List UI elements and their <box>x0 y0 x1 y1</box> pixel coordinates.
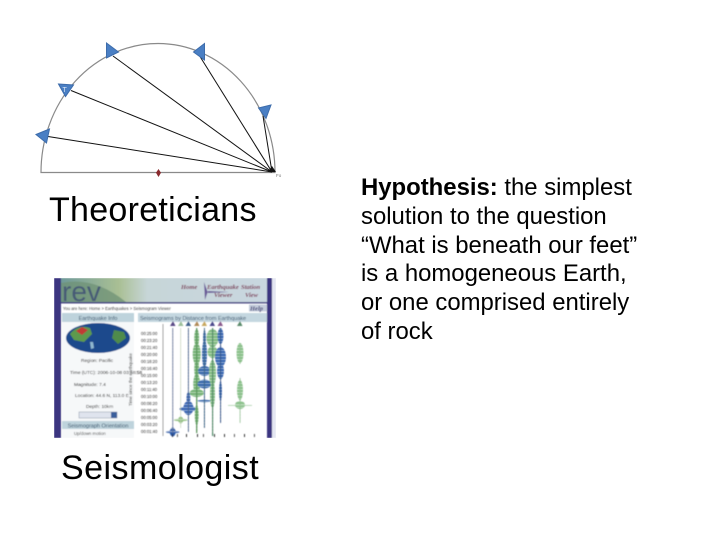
earthquake details: Region: Pacific <box>81 358 114 364</box>
text block: hypothesis: Hypothesis: the simplest <box>361 174 632 201</box>
chart title bar <box>138 313 267 322</box>
time ticks: 00:03:20 <box>141 422 158 427</box>
navigation tabs: Viewer <box>214 292 233 299</box>
panel: seismogram web page screenshot: Seismograph Orientation <box>68 424 128 430</box>
time ticks: 00:01:40 <box>141 429 158 434</box>
time ticks: 00:13:20 <box>141 380 158 385</box>
earthquake source <box>268 166 276 172</box>
time ticks: 00:08:20 <box>141 401 158 406</box>
help button <box>249 304 267 312</box>
trace 3 blobs <box>179 392 197 415</box>
station triangles <box>170 321 242 326</box>
ray paths <box>48 56 272 172</box>
world map <box>66 323 130 353</box>
trace 6 blobs <box>206 329 218 408</box>
earthquake details: Depth: 10km <box>86 404 113 410</box>
text block: hypothesis: or one comprised entirely <box>361 289 629 316</box>
panel: seismogram web page screenshot: Time since the earthquake <box>128 353 133 406</box>
time ticks: 00:05:00 <box>141 415 158 420</box>
left border bar <box>54 278 61 438</box>
time ticks: 00:21:40 <box>141 345 158 350</box>
panel: seismogram web page screenshot: Earthquake Info <box>79 316 117 322</box>
earthquake details: Location: 44.6 N, 113.0 E <box>75 393 129 399</box>
navigation tabs: Earthquake <box>206 284 239 291</box>
left panel <box>62 313 134 438</box>
trace 5 blobs <box>198 330 212 402</box>
section heading: orientation <box>62 421 134 429</box>
heading: Seismologist: Seismologist <box>61 449 259 487</box>
trace centre lines <box>172 328 252 436</box>
time ticks: 00:06:40 <box>141 408 158 413</box>
navigation tabs <box>180 284 261 299</box>
trace 4 blobs <box>190 329 204 425</box>
panel: seismogram web page screenshot: Up/down motion <box>74 431 106 436</box>
source label: Fo <box>276 173 282 178</box>
text block: hypothesis: “What is beneath our feet” <box>361 232 637 259</box>
icon: centre marker <box>156 169 161 177</box>
text block: hypothesis <box>361 174 637 345</box>
text block: hypothesis: solution to the question <box>361 203 607 230</box>
time ticks: 00:11:40 <box>141 387 158 392</box>
time ticks: 00:15:00 <box>141 373 158 378</box>
earthquake details: Magnitude: 7.4 <box>74 382 106 388</box>
trace 8 blobs <box>235 343 245 409</box>
time ticks <box>141 331 158 434</box>
drop-down <box>79 412 117 418</box>
diagram: semicircle with seismic ray paths <box>35 42 282 178</box>
earthquake details <box>70 358 142 410</box>
panel: seismogram web page screenshot: Seismograms by Distance from Earthquake <box>140 316 246 322</box>
time ticks: 00:25:00 <box>141 331 158 336</box>
trace 7 blobs <box>215 328 226 401</box>
navigation tabs: Station <box>241 284 261 291</box>
panel: seismogram web page screenshot <box>54 278 276 438</box>
time ticks: 00:10:00 <box>141 394 158 399</box>
distance ticks <box>172 434 255 437</box>
time ticks: 00:16:40 <box>141 366 158 371</box>
text block: hypothesis: is a homogeneous Earth, <box>361 260 627 287</box>
seismogram traces <box>165 327 255 436</box>
panel: seismogram web page screenshot: Help <box>249 306 264 312</box>
navigation tabs: View <box>245 292 259 299</box>
trace 1 blobs <box>166 428 180 436</box>
stripe texture over traces <box>165 327 255 434</box>
time ticks: 00:20:00 <box>141 352 158 357</box>
text block: hypothesis: of rock <box>361 318 433 345</box>
header rule <box>61 302 267 304</box>
right border bar <box>267 278 272 438</box>
earth outline <box>41 44 275 173</box>
heading: Theoreticians: Theoreticians <box>49 191 257 229</box>
station mark: T <box>62 87 68 94</box>
trace 2 blobs <box>174 416 188 424</box>
chart axis <box>162 324 164 436</box>
time ticks: 00:18:20 <box>141 359 158 364</box>
earthquake details: Time (UTC): 2006-10-08 03:58:58 <box>70 370 142 376</box>
time ticks: 00:23:20 <box>141 338 158 343</box>
breadcrumb: You are here: Home > Earthquakes > Seismogram Viewer <box>63 306 171 311</box>
navigation tabs: Home <box>180 284 197 291</box>
banner <box>61 278 267 302</box>
seismic stations <box>36 43 271 143</box>
